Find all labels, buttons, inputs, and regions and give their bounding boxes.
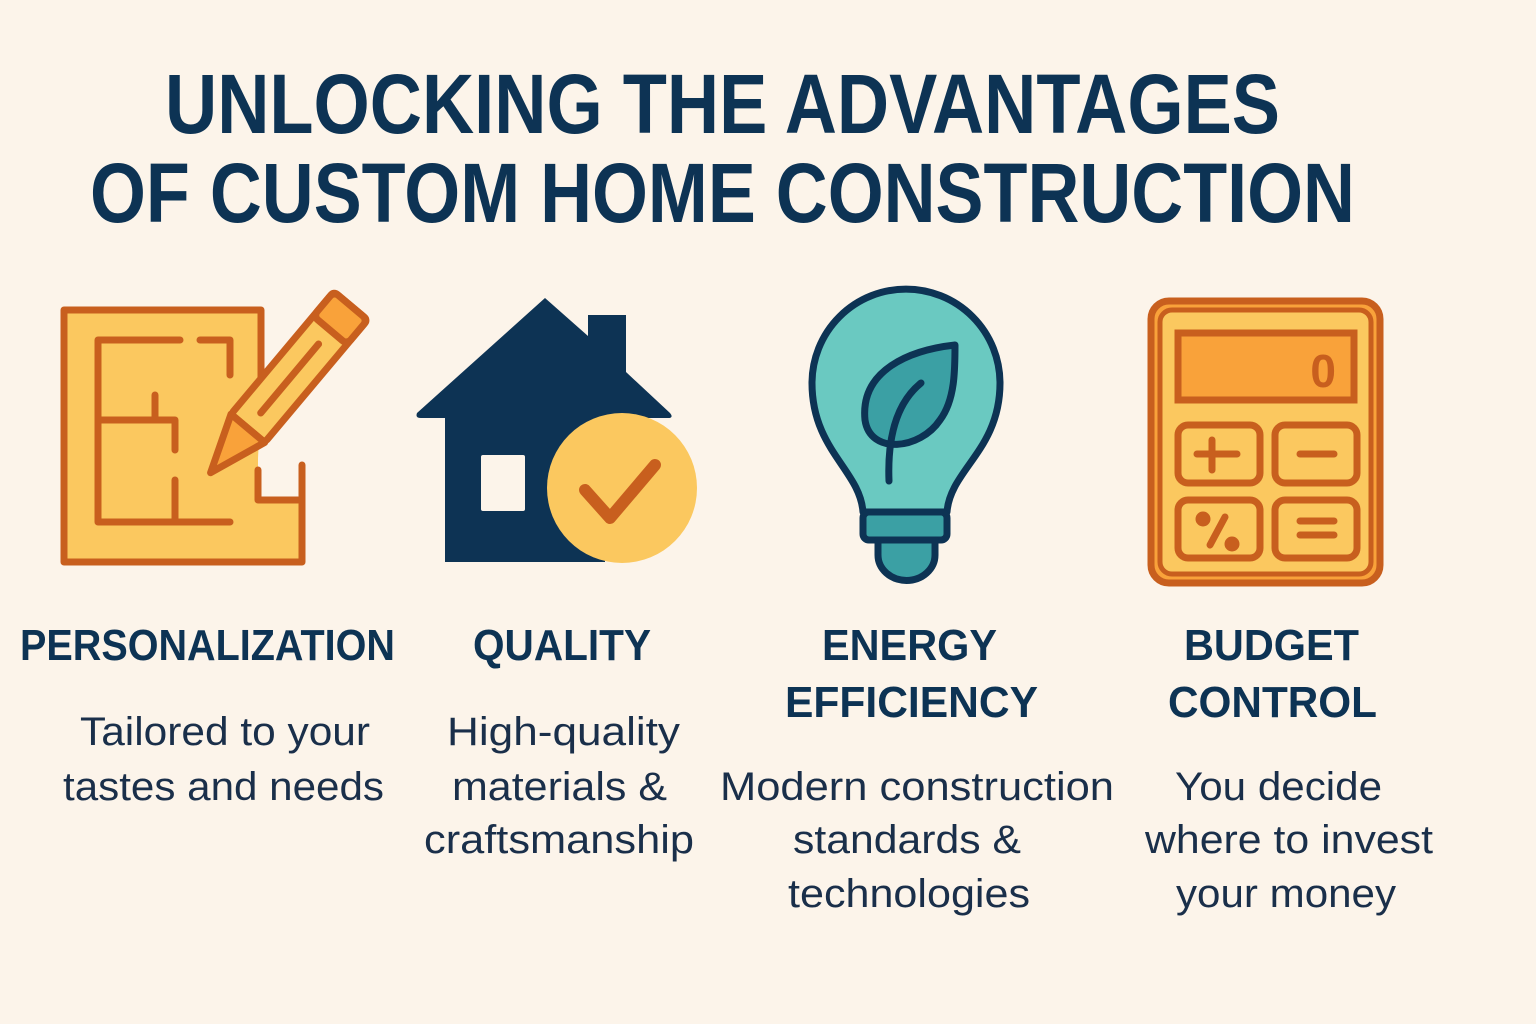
headings: ENERGY [822,621,997,670]
title: OF CUSTOM HOME CONSTRUCTION [90,146,1355,240]
title [90,57,1355,240]
headings: BUDGET [1184,621,1359,670]
title: UNLOCKING THE ADVANTAGES [165,57,1280,151]
headings: EFFICIENCY [785,678,1038,727]
descriptions: standards & [793,818,1021,862]
descriptions: Tailored to your [80,710,370,754]
descriptions: materials & [452,765,667,809]
icon: calculator [1151,301,1380,583]
headings: PERSONALIZATION [20,621,395,670]
descriptions: High-quality [447,710,680,754]
descriptions: tastes and needs [63,765,384,809]
descriptions: your money [1176,872,1396,916]
headings: CONTROL [1168,678,1377,727]
headings: QUALITY [473,621,651,670]
descriptions [63,710,1433,916]
descriptions: You decide [1175,765,1382,809]
descriptions: craftsmanship [424,818,694,862]
icon: light bulb with leaf [812,289,1000,580]
icon: floor plan with pencil [64,292,368,562]
headings [20,621,1377,727]
descriptions: Modern construction [720,765,1114,809]
icon: house with check [416,298,697,563]
descriptions: where to invest [1144,818,1433,862]
icon: calculator: 0 [1310,345,1336,397]
descriptions: technologies [788,872,1030,916]
